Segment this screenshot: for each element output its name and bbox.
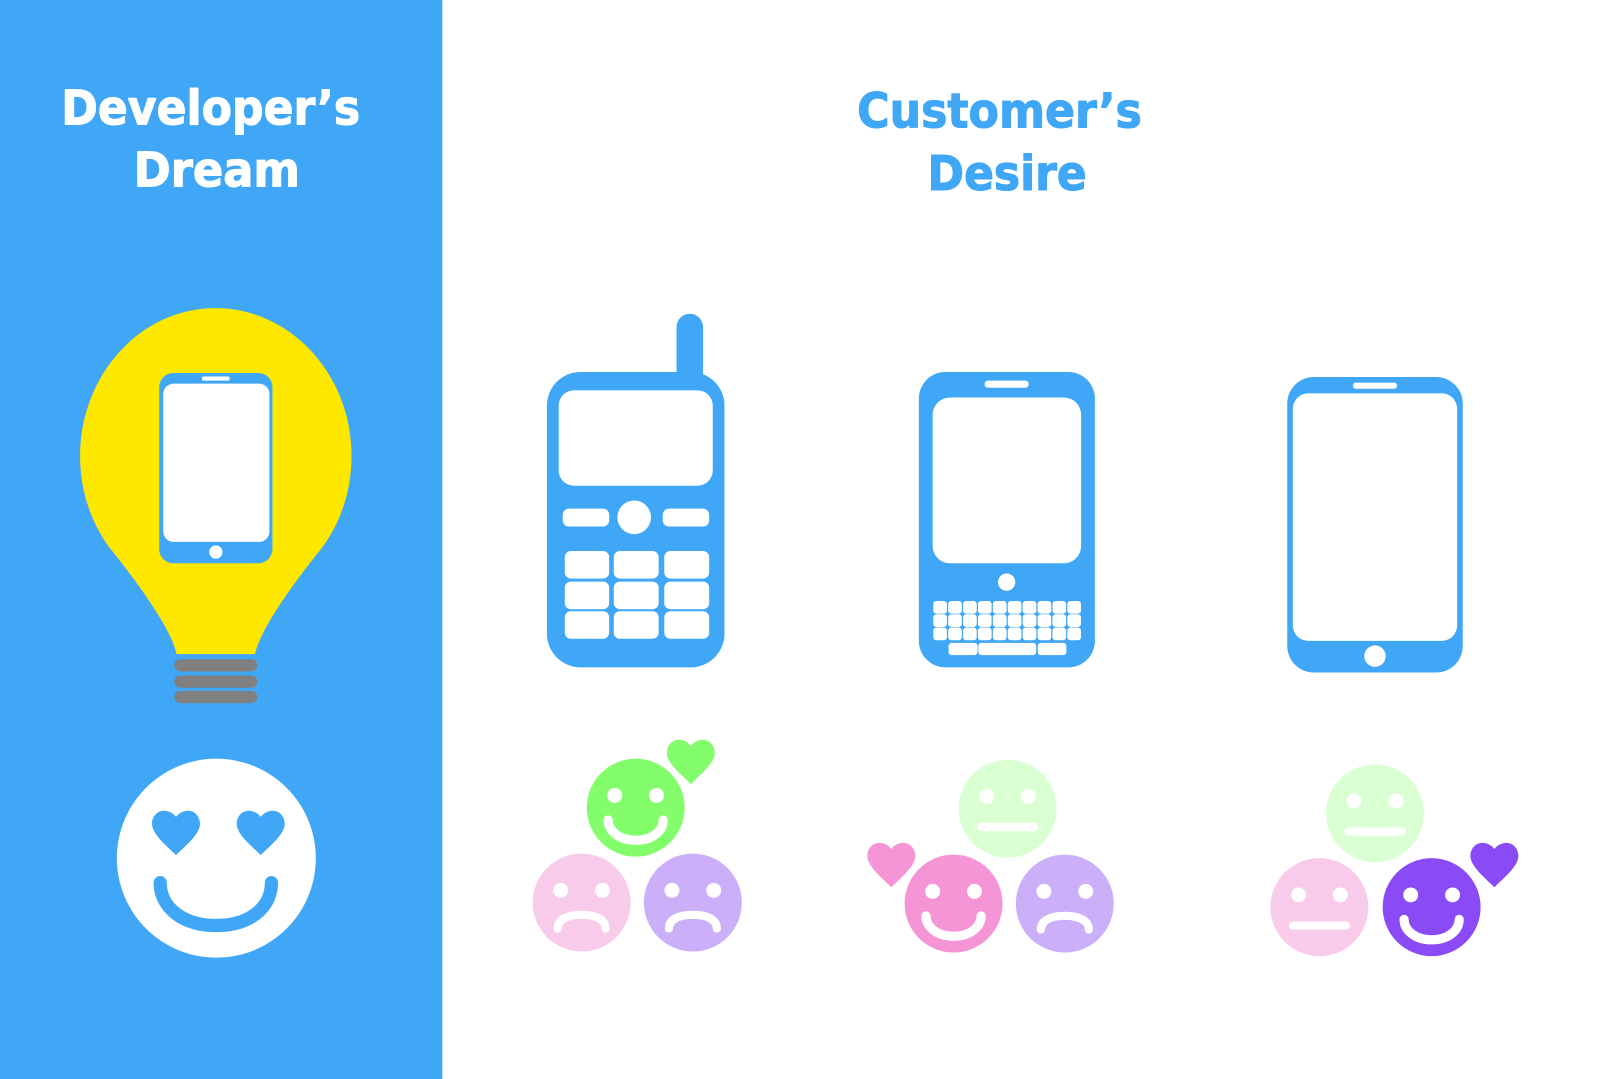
group: reactions to keyboard smartphone bbox=[867, 760, 1114, 953]
face: happy green bbox=[587, 759, 685, 857]
face: sad pink bbox=[533, 854, 631, 952]
face: sad purple bbox=[644, 854, 742, 952]
heading: Customer's Desire: Customer’s bbox=[857, 84, 1142, 140]
icon: purple heart bbox=[1470, 843, 1518, 887]
group: reactions to feature phone bbox=[533, 740, 742, 952]
face: neutral light green bbox=[1326, 764, 1424, 862]
face: neutral light green bbox=[959, 760, 1057, 858]
icon: full-screen smartphone bbox=[1287, 377, 1463, 672]
heading: Customer's Desire: Desire bbox=[928, 146, 1087, 202]
bulb glass bbox=[80, 308, 352, 654]
icon: pink heart bbox=[867, 843, 915, 887]
bulb base bbox=[174, 659, 257, 703]
group: reactions to full-screen smartphone bbox=[1270, 764, 1518, 956]
icon: green heart bbox=[667, 740, 715, 784]
icon: light bulb with smartphone bbox=[80, 308, 352, 703]
heading: Customer's Desire bbox=[857, 84, 1142, 202]
icon: keyboard smartphone bbox=[919, 372, 1095, 667]
icon: feature phone with antenna bbox=[547, 314, 724, 667]
smartphone in bulb bbox=[159, 373, 272, 563]
face: happy purple bbox=[1383, 858, 1481, 956]
heading: Developer's Dream bbox=[61, 80, 360, 199]
panel background bbox=[0, 0, 442, 1079]
face: happy pink bbox=[905, 855, 1003, 953]
face: sad purple bbox=[1016, 855, 1114, 953]
heading: Developer's Dream: Developer’s bbox=[61, 80, 360, 136]
panel: developer's dream bbox=[0, 0, 442, 1079]
icon: face with heart eyes bbox=[117, 759, 316, 958]
face: neutral pink bbox=[1270, 858, 1368, 956]
heading: Developer's Dream: Dream bbox=[134, 143, 300, 199]
